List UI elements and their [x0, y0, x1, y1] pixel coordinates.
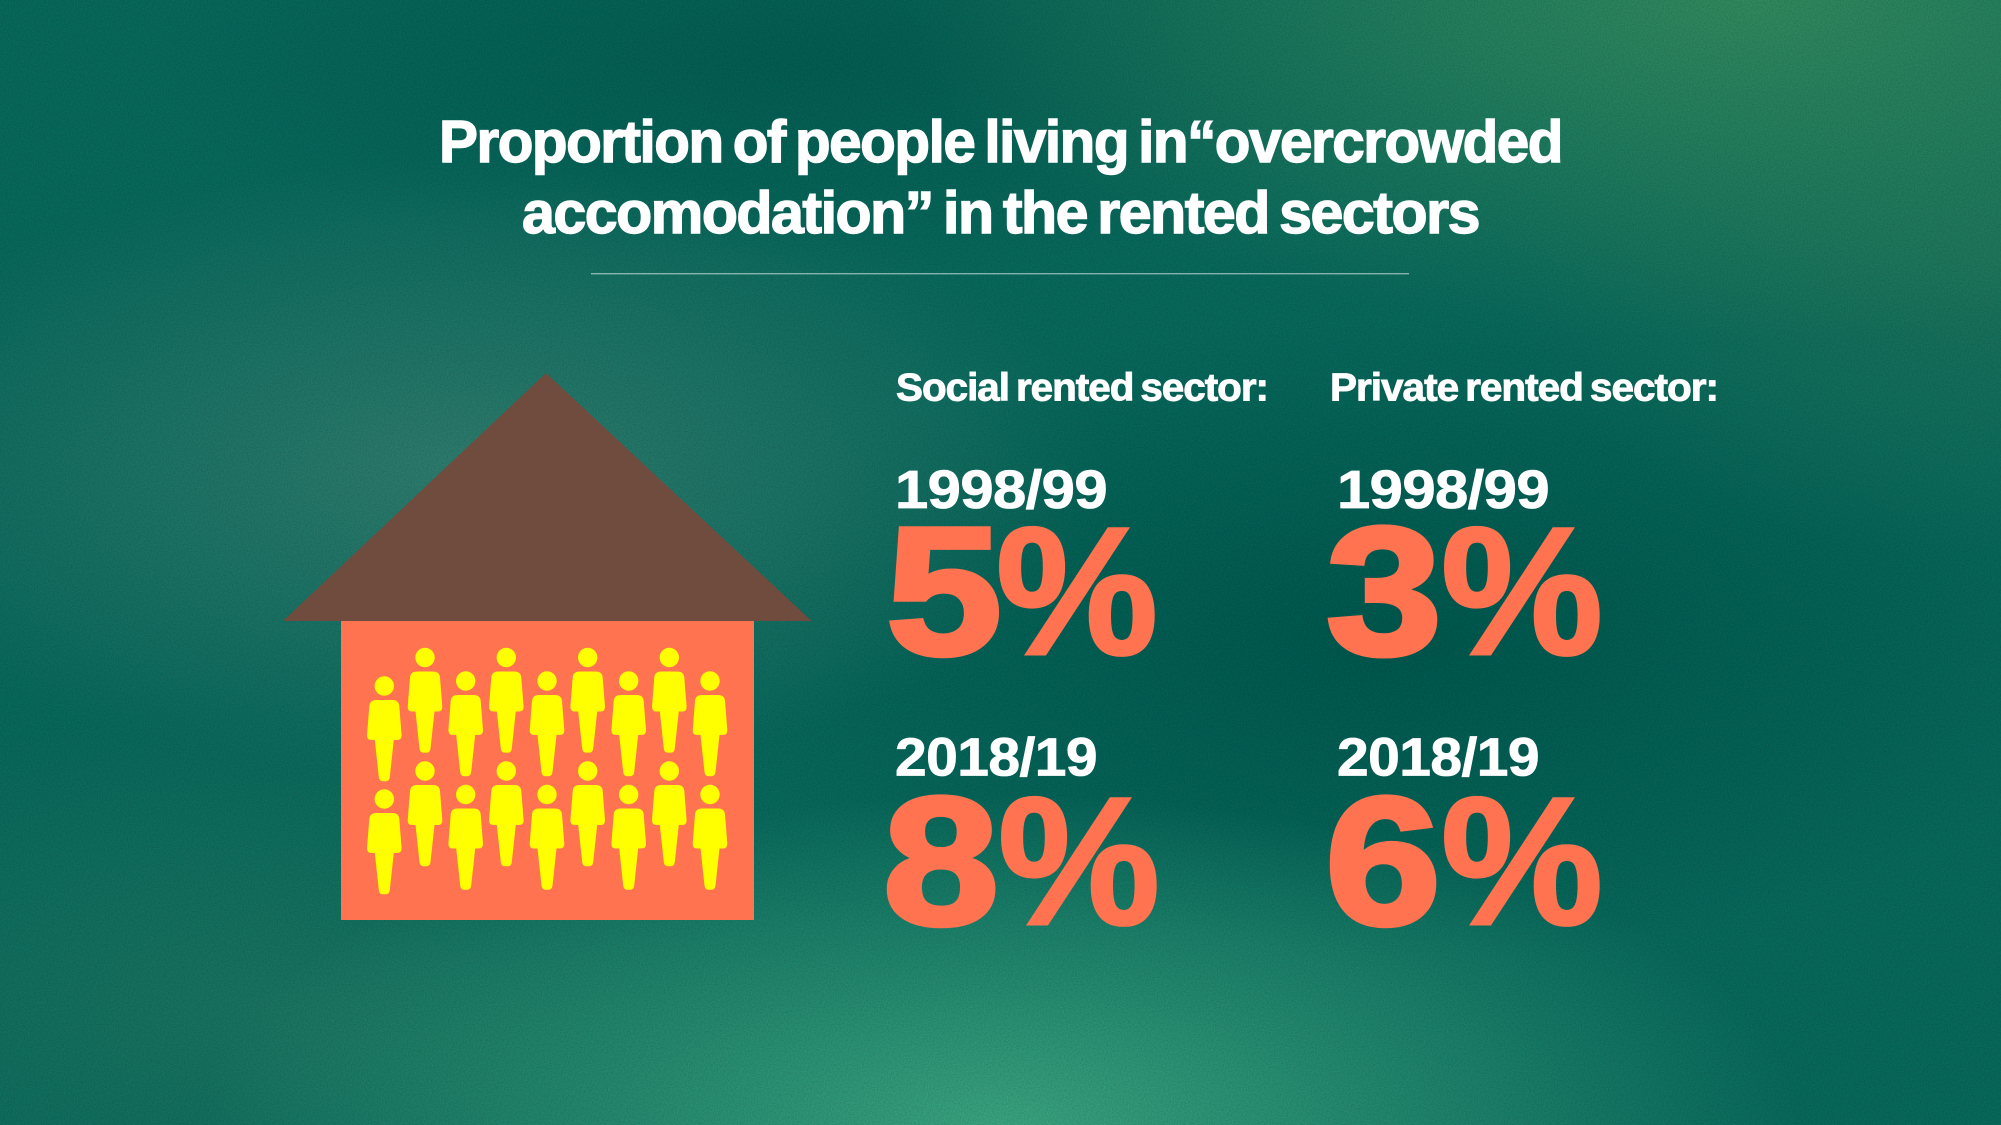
- heading: private rented sector: Private rented sector:: [1330, 366, 1718, 410]
- title: accomodation” in the rented sectors: [522, 180, 1479, 246]
- stat 8%: 8: [883, 759, 999, 963]
- year label 1998/99: 1998/99: [1337, 460, 1549, 520]
- stat 5%: %: [996, 489, 1158, 693]
- stat 3%: %: [1441, 489, 1603, 693]
- stat 3%: 3: [1326, 489, 1442, 693]
- panel: private rented sector: [1325, 366, 1718, 963]
- title: [439, 109, 1562, 246]
- heading: social rented sector: Social rented sector:: [896, 366, 1268, 410]
- stat 6%: 6: [1325, 759, 1441, 963]
- icon: house with crowded people: [283, 373, 812, 920]
- stat 6%: %: [1441, 759, 1603, 963]
- stat 6%: [1325, 759, 1603, 963]
- stat 8%: [883, 759, 1160, 963]
- stat 5%: 5: [886, 489, 1002, 693]
- year label 2018/19: 2018/19: [1337, 728, 1539, 788]
- house roof: [283, 373, 812, 621]
- house body: [341, 621, 754, 920]
- crowd of people figures: [367, 648, 727, 894]
- stat 3%: [1326, 489, 1603, 693]
- title: Proportion of people living in“overcrowded: [439, 109, 1562, 175]
- year label 2018/19: 2018/19: [895, 728, 1097, 788]
- stat 8%: %: [998, 759, 1160, 963]
- panel: social rented sector: [883, 366, 1268, 963]
- stat 5%: [886, 489, 1158, 693]
- year label 1998/99: 1998/99: [895, 460, 1107, 520]
